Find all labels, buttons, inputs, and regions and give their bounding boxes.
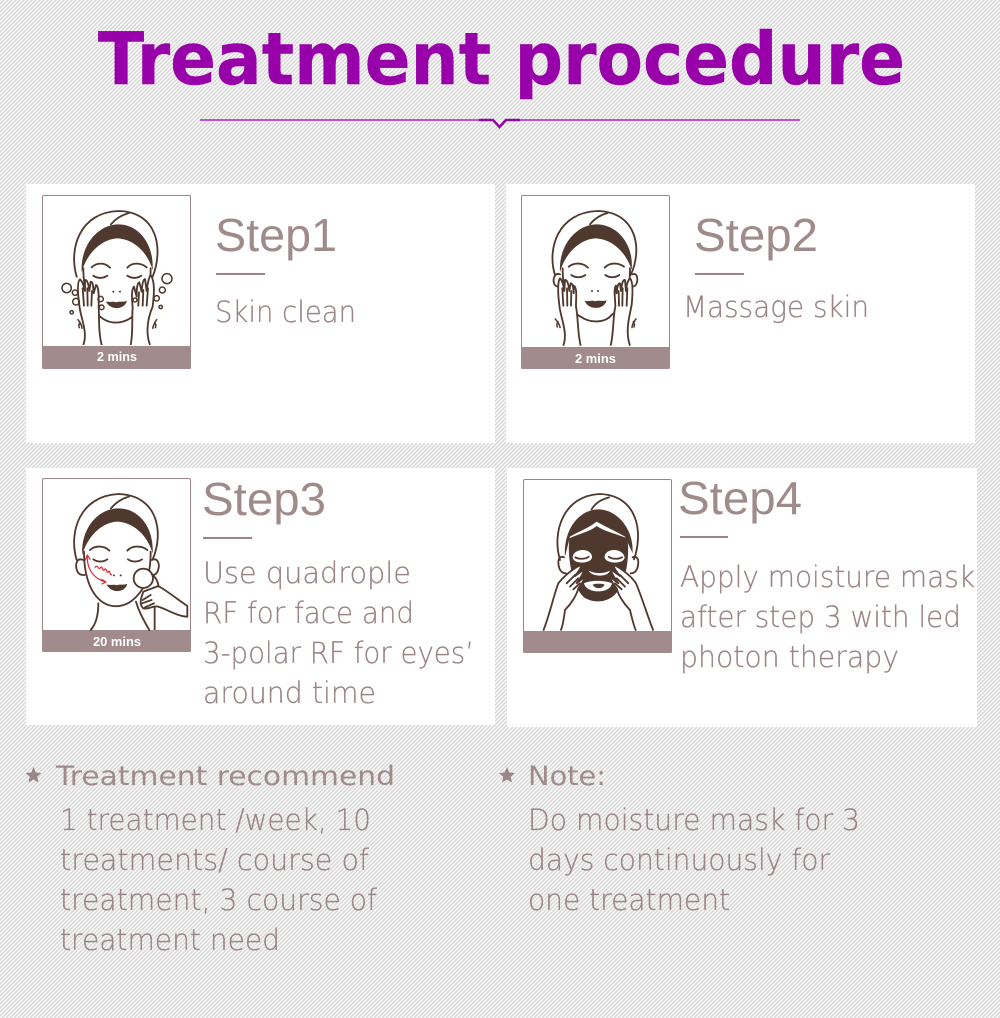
text: step 4: after step 3 with led — [680, 600, 961, 634]
title divider with chevron — [200, 119, 800, 127]
text: treatment recommend: treatments/ course of — [60, 843, 370, 877]
text: note: days continuously for — [528, 843, 830, 877]
icon: face massage card — [521, 196, 670, 369]
panel: step 4 — [507, 468, 977, 727]
text: step 3: 3-polar RF for eyes’ — [203, 636, 474, 670]
icon: RF device card — [42, 478, 191, 652]
panel: step 1 — [26, 184, 495, 443]
icon: RF device card: 20 mins — [93, 634, 141, 649]
panel: step 2 — [506, 184, 975, 443]
text: treatment recommend: treatment need — [60, 923, 280, 957]
icon: star — [499, 767, 515, 782]
icon: face mask card — [523, 480, 672, 653]
text: treatment recommend — [60, 803, 378, 957]
text: step 1: Skin clean — [215, 295, 356, 329]
heading: step 4: Step4 — [678, 472, 802, 524]
text: step 3: RF for face and — [203, 596, 414, 630]
heading: treatment recommend: Treatment recommend — [55, 761, 395, 792]
text: step 3: Use quadrople — [203, 556, 411, 590]
heading: step 3: Step3 — [202, 473, 326, 525]
icon: star — [26, 767, 42, 782]
text: step 3: around time — [203, 676, 376, 710]
icon: face washing card — [42, 196, 191, 369]
title: Treatment procedure — [98, 17, 905, 101]
icon: face washing card: 2 mins — [97, 349, 137, 364]
block: note — [499, 761, 860, 917]
text: step 4 — [680, 560, 975, 674]
heading: step 2: Step2 — [694, 209, 818, 261]
text: step 4: photon therapy — [680, 640, 899, 674]
panel: step 3 — [26, 468, 495, 725]
text: note: Do moisture mask for 3 — [528, 803, 860, 837]
text: step 4: Apply moisture mask — [680, 560, 975, 594]
text: note: one treatment — [528, 883, 730, 917]
block: treatment recommend — [26, 761, 395, 957]
icon: face massage card: 2 mins — [575, 351, 616, 366]
text: note — [528, 803, 860, 917]
text: treatment recommend: treatment, 3 course of — [60, 883, 378, 917]
heading: note: Note: — [528, 761, 606, 792]
text: treatment recommend: 1 treatment /week, 10 — [60, 803, 371, 837]
heading: step 1: Step1 — [215, 209, 337, 261]
text: step 3 — [203, 556, 474, 710]
text: step 2: Massage skin — [683, 290, 869, 324]
